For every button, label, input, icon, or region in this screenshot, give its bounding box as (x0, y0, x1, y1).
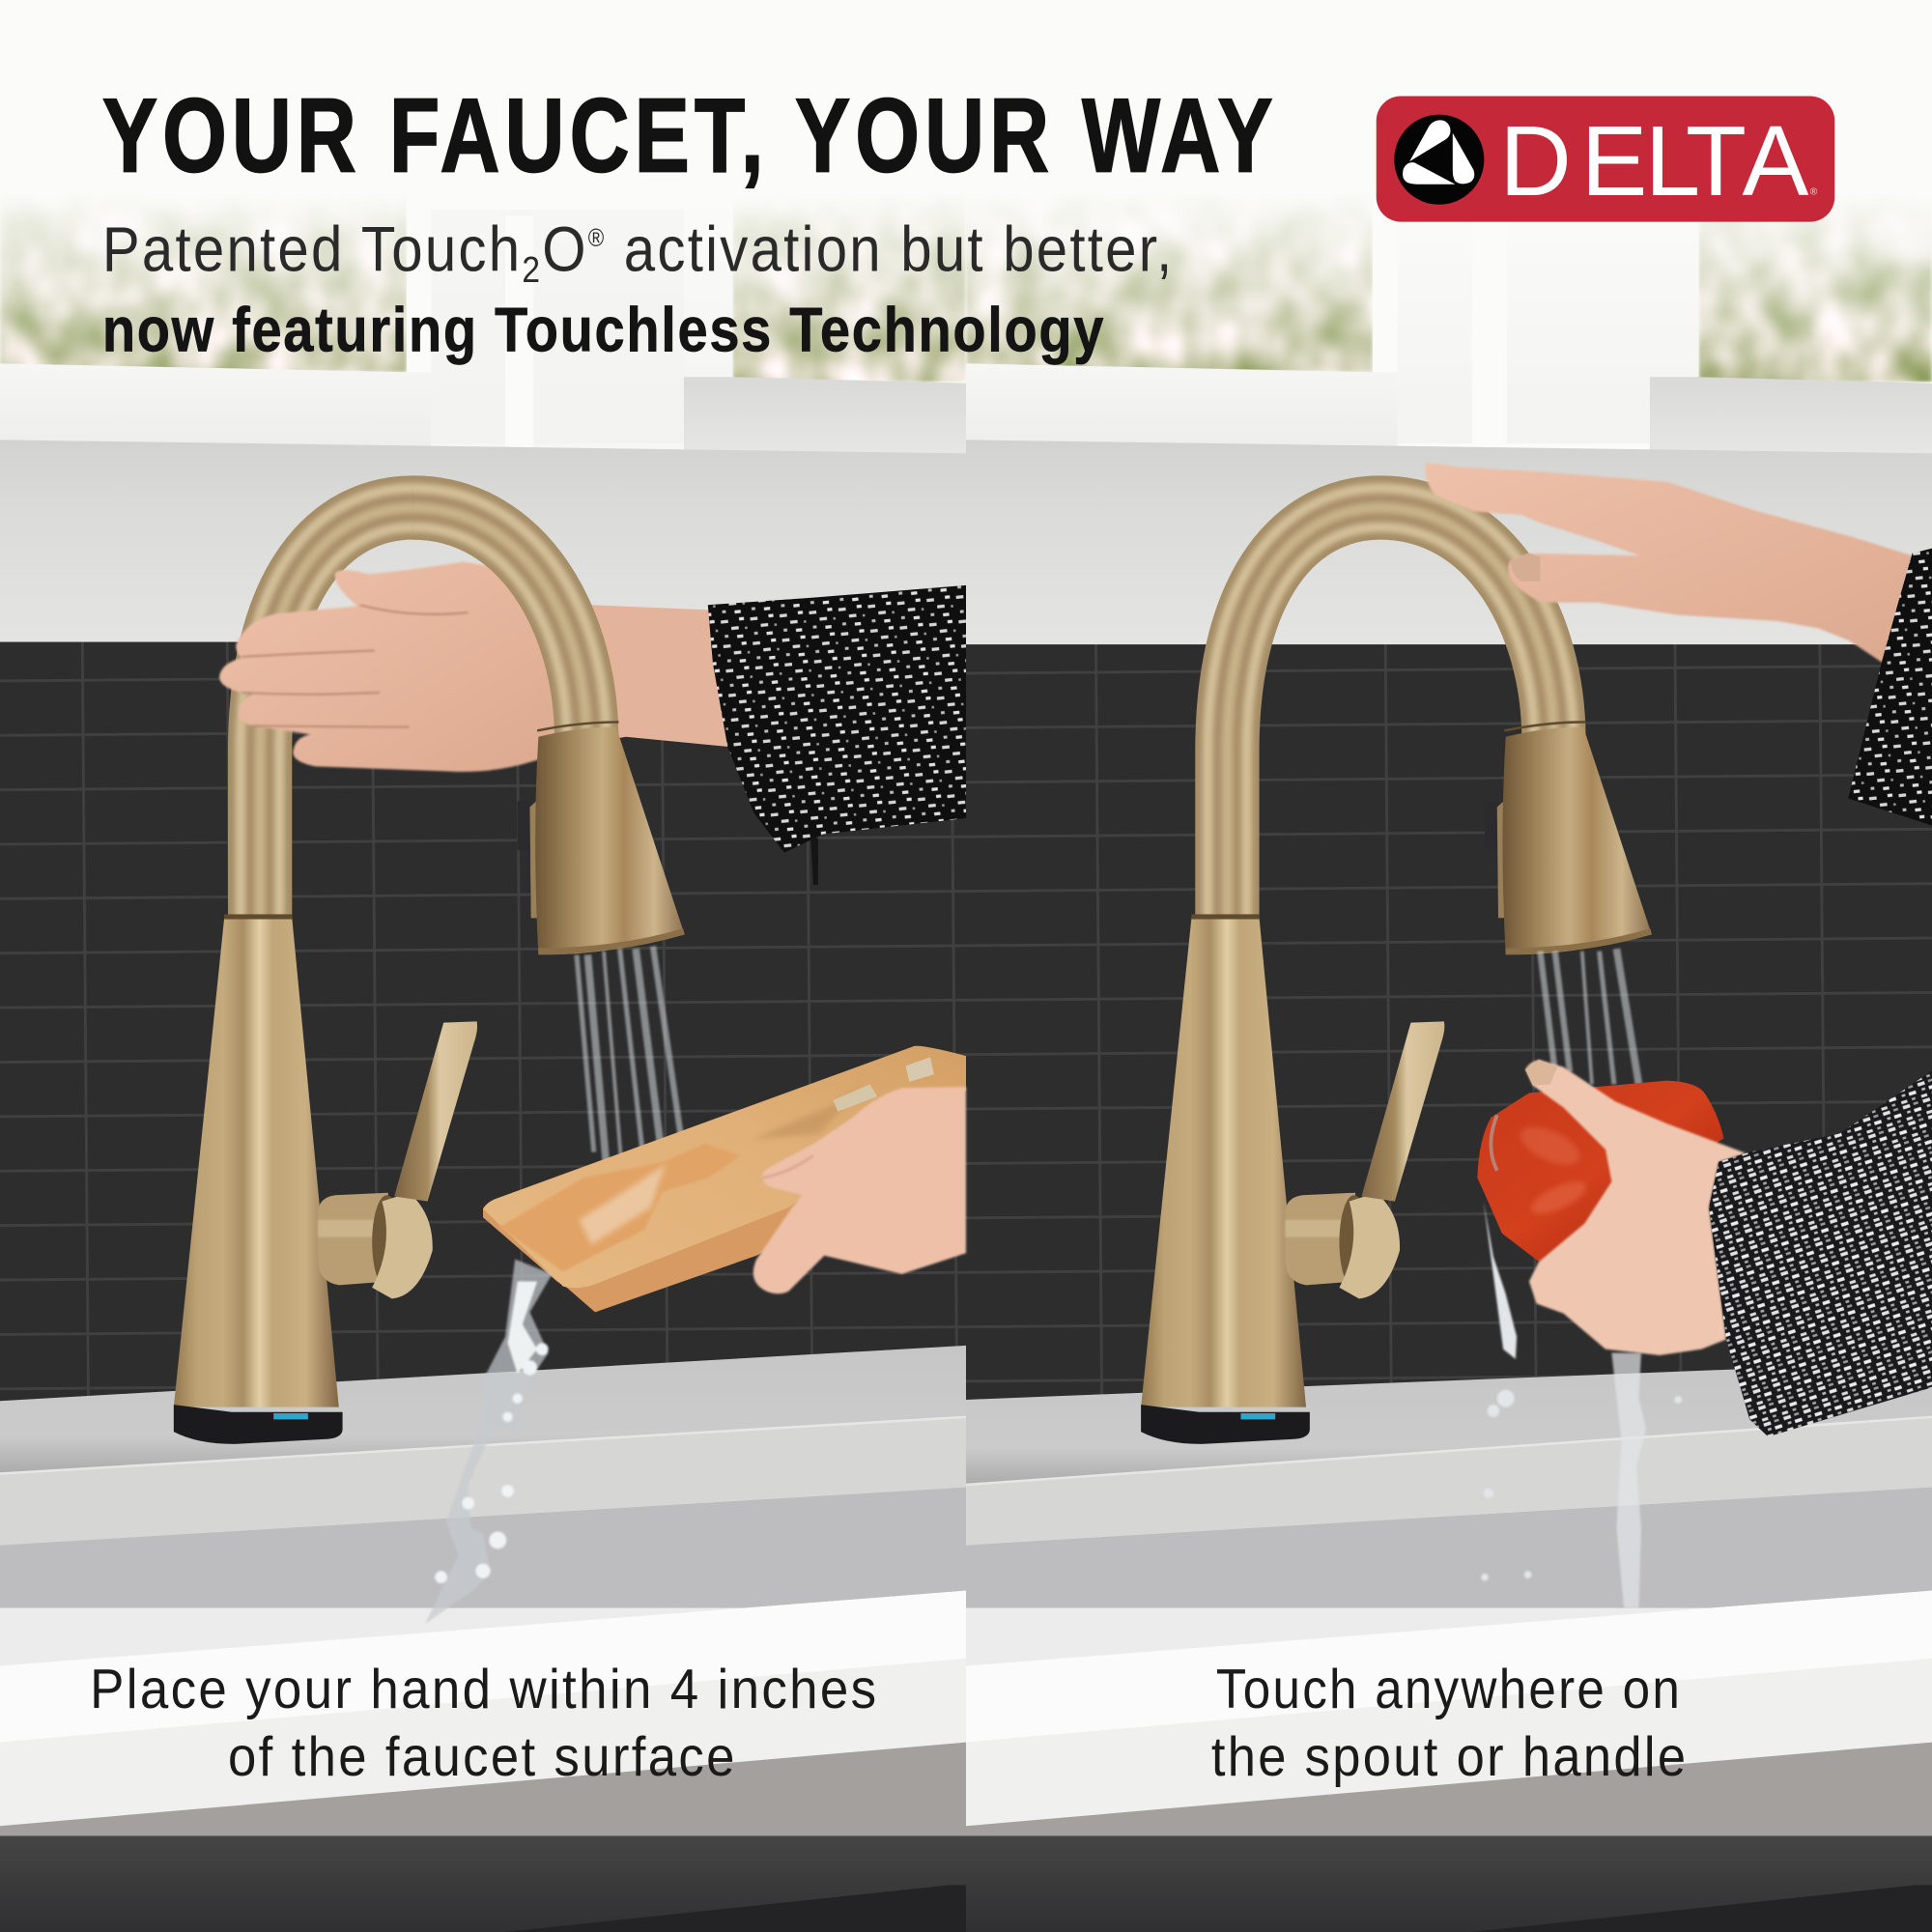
caption: left (90, 1659, 878, 1788)
subtitle line 1: 2 (522, 249, 542, 291)
wet area on board (499, 1144, 741, 1271)
logo: Delta: ® (1810, 187, 1818, 198)
caption: left: of the faucet surface (228, 1726, 737, 1788)
left spout right arc over hand (412, 475, 685, 954)
right upper hand touching spout (1426, 464, 1932, 826)
left hand in front of neck (219, 562, 567, 772)
right lower hand (1525, 1060, 1932, 1436)
left faucet (174, 508, 684, 1444)
sleeve: right upper (1848, 549, 1932, 826)
logo: Delta (1377, 96, 1834, 222)
subtitle line 1: activation but better, (606, 214, 1175, 286)
caption: left: Place your hand within 4 inches (90, 1659, 878, 1720)
subtitle line 2: now featuring Touchless Technology (102, 295, 1105, 365)
red pepper (1477, 1081, 1723, 1262)
left lower hand (753, 1087, 966, 1293)
wordmark: DELTA (1499, 104, 1809, 216)
subtitle line 1: ® (588, 225, 606, 252)
caption: right: Touch anywhere on (1216, 1659, 1682, 1720)
right water stream (1540, 949, 1638, 1084)
subtitle line 1: Patented Touch (102, 214, 581, 286)
sleeve: right lower (1709, 1070, 1932, 1436)
tile backsplash (0, 642, 1932, 1421)
left water stream from spray head (577, 947, 681, 1189)
cutting board (483, 1046, 966, 1312)
caption: right (1211, 1659, 1688, 1788)
caption: right: the spout or handle (1211, 1726, 1688, 1788)
title: YOUR FAUCET, YOUR WAY (102, 76, 1278, 193)
sleeve: left (708, 585, 966, 885)
right faucet (1141, 508, 1651, 1444)
left water splash falling (425, 1260, 552, 1624)
caption band and dark base (0, 1591, 1932, 1932)
subtitle line 1: O (542, 214, 588, 286)
left forearm behind faucet (542, 604, 728, 752)
right water drips (1481, 1202, 1682, 1608)
icon: Delta triangle mark (1394, 115, 1484, 205)
counter and sink edge (0, 1346, 1932, 1614)
